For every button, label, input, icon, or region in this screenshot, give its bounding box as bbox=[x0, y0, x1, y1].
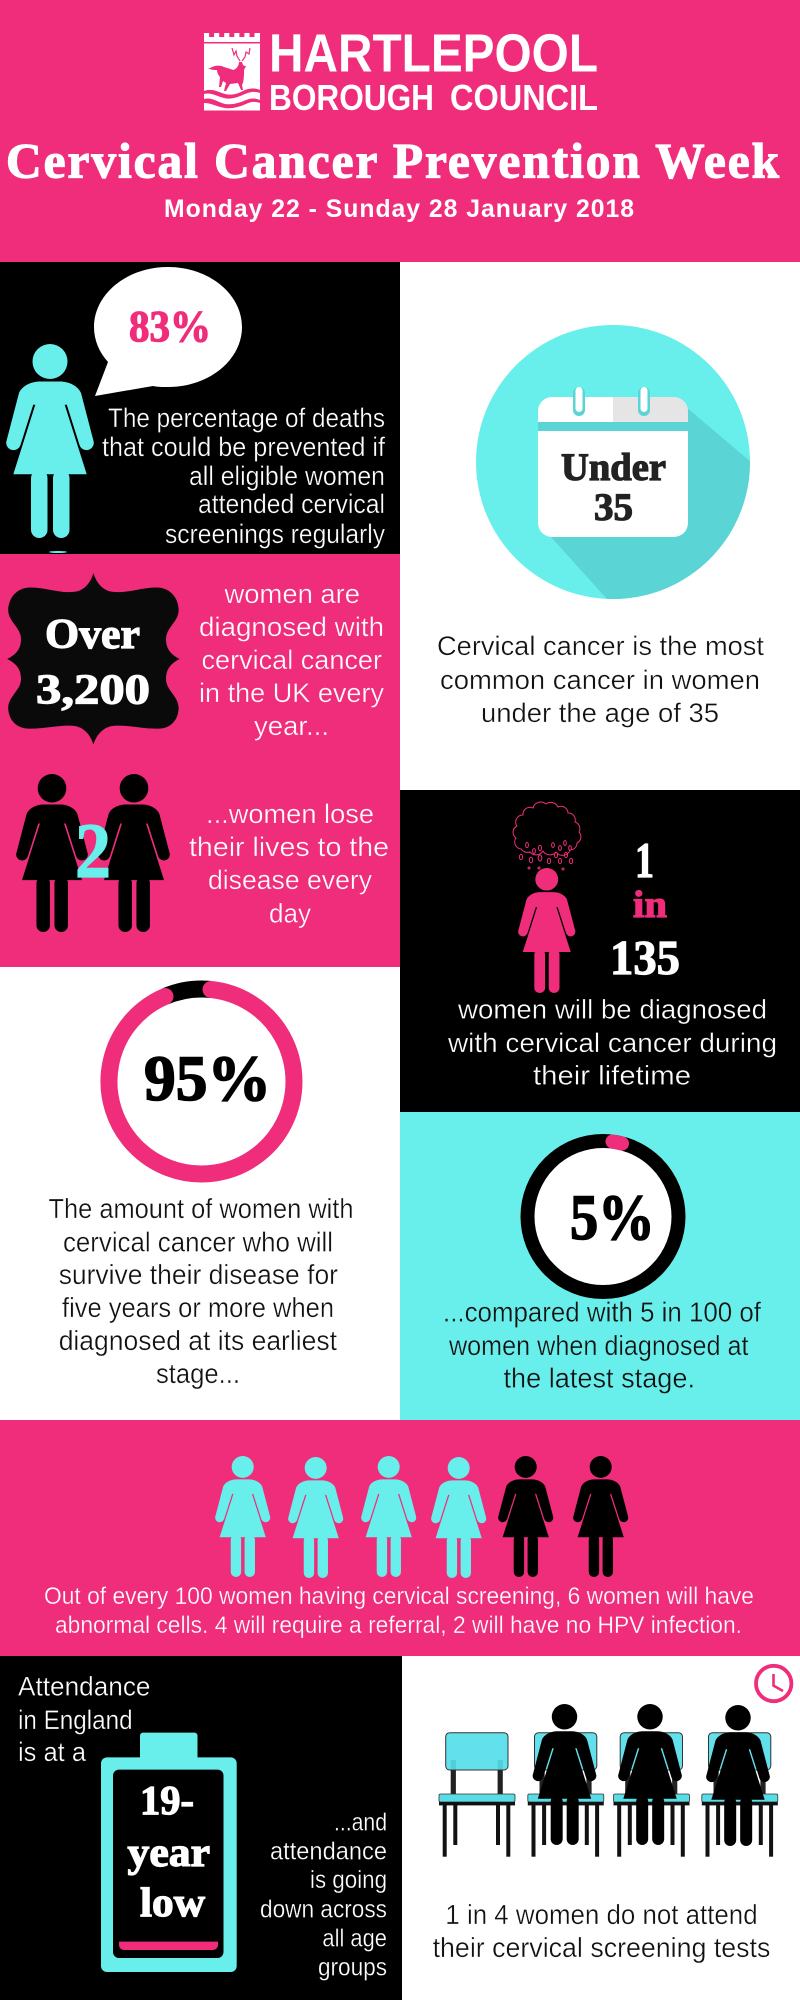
text: survival at earliest stage bbox=[48, 1193, 354, 1389]
ring chart: 95%: 95% bbox=[144, 1043, 271, 1115]
text: survival at earliest stage: cervical cancer who will bbox=[63, 1227, 333, 1258]
text: percentage of deaths: that could be prevented if bbox=[102, 432, 386, 462]
text: attendance going down: is going bbox=[310, 1866, 387, 1894]
text: most common cancer: common cancer in women bbox=[440, 665, 760, 695]
speech bubble bbox=[94, 267, 242, 396]
stat: 1 in 135: 1 bbox=[635, 832, 654, 888]
text: women lose their lives bbox=[189, 799, 389, 928]
icon: woman teal bbox=[6, 344, 94, 538]
text: most common cancer bbox=[437, 631, 765, 728]
ring chart: 95% bbox=[109, 989, 294, 1174]
panel: 1 in 4 do not attend bbox=[402, 1656, 800, 2000]
stat: 1 in 135: 135 bbox=[610, 930, 680, 985]
text: attendance in England bbox=[18, 1672, 150, 1767]
icon: calendar in circle bbox=[476, 325, 750, 599]
date: Monday 22 - Sunday 28 January 2018 bbox=[164, 195, 635, 223]
panel: diagnoses and deaths bbox=[0, 554, 400, 967]
text: attendance in England: is at a bbox=[18, 1737, 87, 1767]
text: women will be diagnosed: with cervical cancer during bbox=[447, 1028, 777, 1058]
text: women are diagnosed: women are bbox=[223, 579, 360, 609]
stat: 1 in 135: in bbox=[633, 884, 667, 926]
battery text: low bbox=[140, 1879, 205, 1925]
text: abnormal cells: abnormal cells. 4 will require a referral, 2 will have no HPV infection. bbox=[55, 1612, 742, 1639]
logo wordmark: HARTLEPOOL bbox=[269, 23, 598, 83]
logo wordmark: COUNCIL bbox=[450, 77, 598, 118]
text: attendance going down: attendance bbox=[270, 1838, 387, 1866]
text: attendance in England: in England bbox=[18, 1705, 133, 1735]
text: women are diagnosed: diagnosed with bbox=[199, 612, 384, 642]
icon: two women with number 2: 2 bbox=[75, 807, 111, 894]
small teal mark bbox=[49, 551, 67, 553]
text: attendance in England: Attendance bbox=[18, 1672, 150, 1702]
text: attendance going down: ...and bbox=[334, 1809, 387, 1837]
text: most common cancer: Cervical cancer is the most bbox=[437, 631, 765, 661]
text: survival at earliest stage: survive their disease for bbox=[59, 1259, 338, 1290]
text: percentage of deaths: attended cervical bbox=[198, 489, 385, 519]
text: attendance going down: down across bbox=[260, 1896, 387, 1924]
stat: 1 in 135 bbox=[610, 832, 680, 985]
text: women lose their lives: ...women lose bbox=[206, 799, 374, 829]
plaque: over 3,200: Over bbox=[45, 612, 140, 658]
text: survival at earliest stage: The amount of women with bbox=[48, 1193, 354, 1224]
icon row: six women bbox=[215, 1456, 628, 1578]
calendar text bbox=[561, 446, 666, 529]
ring chart: 5%: 5% bbox=[570, 1182, 655, 1254]
text: compared with 5 in 100 bbox=[443, 1297, 761, 1394]
text: women are diagnosed bbox=[199, 579, 385, 741]
text: attendance going down bbox=[260, 1809, 387, 1982]
panel: 83 percent bbox=[0, 262, 400, 554]
logo wordmark bbox=[269, 23, 598, 118]
text: women are diagnosed: in the UK every bbox=[199, 678, 385, 708]
panel: out of every 100 women bbox=[0, 1420, 800, 1656]
text: percentage of deaths: screenings regularly bbox=[165, 519, 386, 549]
battery text bbox=[128, 1777, 210, 1925]
text: do not attend: their cervical screening tests bbox=[433, 1932, 770, 1963]
title: Cervical Cancer Prevention Week bbox=[6, 132, 781, 188]
text: compared with 5 in 100: ...compared with 5 in 100 of bbox=[443, 1297, 761, 1328]
panel: 5 percent bbox=[400, 1112, 800, 1420]
text: attendance going down: groups bbox=[318, 1954, 387, 1982]
text: do not attend bbox=[433, 1899, 770, 1963]
text: survival at earliest stage: diagnosed at its earliest bbox=[59, 1325, 337, 1356]
text: women will be diagnosed: their lifetime bbox=[533, 1061, 691, 1091]
calendar text: 35 bbox=[594, 486, 633, 529]
header panel bbox=[0, 0, 800, 262]
text: compared with 5 in 100: the latest stage. bbox=[504, 1363, 695, 1394]
icon: low battery bbox=[101, 1733, 237, 1972]
text: women will be diagnosed bbox=[447, 995, 777, 1091]
text: abnormal cells bbox=[44, 1583, 754, 1639]
text: abnormal cells: Out of every 100 women having cervical screening, 6 women will have bbox=[44, 1583, 754, 1610]
icon: two women with number 2 bbox=[16, 774, 170, 932]
icon: clock bbox=[756, 1666, 791, 1701]
logo crest bbox=[204, 33, 260, 110]
plaque: over 3,200 bbox=[7, 573, 180, 745]
logo wordmark: BOROUGH bbox=[269, 77, 434, 118]
text: do not attend: 1 in 4 women do not attend bbox=[445, 1899, 758, 1930]
text: survival at earliest stage: stage... bbox=[156, 1358, 240, 1389]
ring chart: 5% bbox=[528, 1141, 678, 1292]
panel: under 35 bbox=[438, 325, 764, 728]
panel: attendance low bbox=[0, 1656, 402, 2000]
panel: 95 percent bbox=[0, 967, 400, 1423]
text: most common cancer: under the age of 35 bbox=[481, 698, 719, 728]
icon: rain cloud bbox=[513, 802, 581, 870]
text: women lose their lives: their lives to the bbox=[189, 832, 389, 862]
panel: 1 in 135 bbox=[400, 790, 800, 1112]
83%: 83% bbox=[129, 302, 211, 351]
text: percentage of deaths: The percentage of deaths bbox=[108, 403, 385, 433]
calendar text: Under bbox=[561, 446, 666, 489]
text: women are diagnosed: cervical cancer bbox=[202, 645, 382, 675]
text: survival at earliest stage: five years or more when bbox=[62, 1292, 334, 1323]
text: percentage of deaths bbox=[102, 403, 386, 549]
text: women are diagnosed: year... bbox=[254, 711, 329, 741]
text: compared with 5 in 100: women when diagnosed at bbox=[448, 1330, 749, 1361]
icon: four chairs and three women bbox=[439, 1704, 778, 1857]
text: attendance going down: all age bbox=[322, 1924, 387, 1952]
text: women will be diagnosed: women will be diagnosed bbox=[457, 995, 767, 1025]
battery text: year bbox=[128, 1829, 210, 1875]
plaque: over 3,200: 3,200 bbox=[36, 668, 150, 714]
text: women lose their lives: disease every bbox=[208, 865, 373, 895]
battery text: 19- bbox=[140, 1777, 194, 1823]
icon: woman pink bbox=[518, 868, 575, 993]
text: percentage of deaths: all eligible women bbox=[189, 461, 385, 491]
text: women lose their lives: day bbox=[269, 898, 312, 928]
